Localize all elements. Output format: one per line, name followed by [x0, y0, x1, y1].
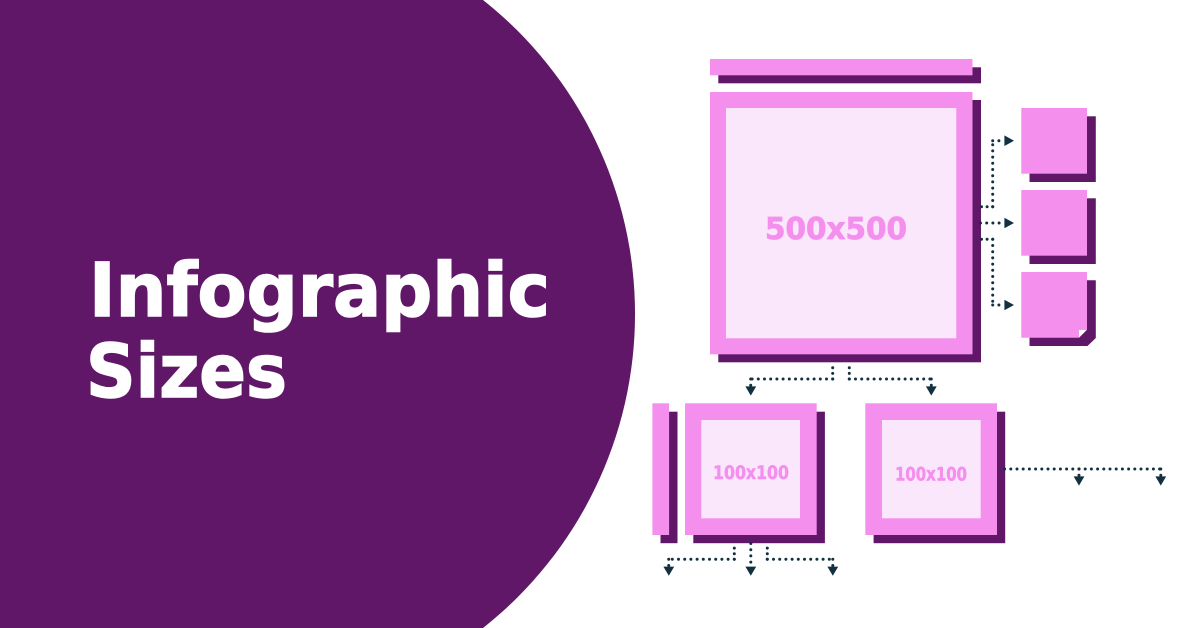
title: [86, 248, 550, 415]
purple circle background: [0, 0, 635, 628]
narrow side bar: [652, 403, 678, 543]
side square 2: [1021, 190, 1096, 264]
arrows: right of lower right block: [1004, 469, 1166, 486]
arrows: main block to side squares: [980, 135, 1014, 310]
lower right 100x100 block: [865, 403, 1005, 543]
top banner block: [710, 59, 981, 83]
title: Sizes: [86, 329, 287, 415]
lower right 100x100 block: 100x100: [895, 464, 967, 486]
side square 3 with folded corner: [1021, 272, 1096, 346]
main 500x500 block: [710, 92, 981, 362]
lower left 100x100 block: [685, 403, 825, 543]
side square 1: [1021, 108, 1096, 182]
arrows: below lower left block: [663, 543, 838, 576]
arrows: main block to lower blocks: [745, 362, 937, 396]
main 500x500 block: 500x500: [765, 212, 907, 247]
lower left 100x100 block: 100x100: [713, 463, 789, 484]
title: Infographic: [89, 248, 550, 334]
